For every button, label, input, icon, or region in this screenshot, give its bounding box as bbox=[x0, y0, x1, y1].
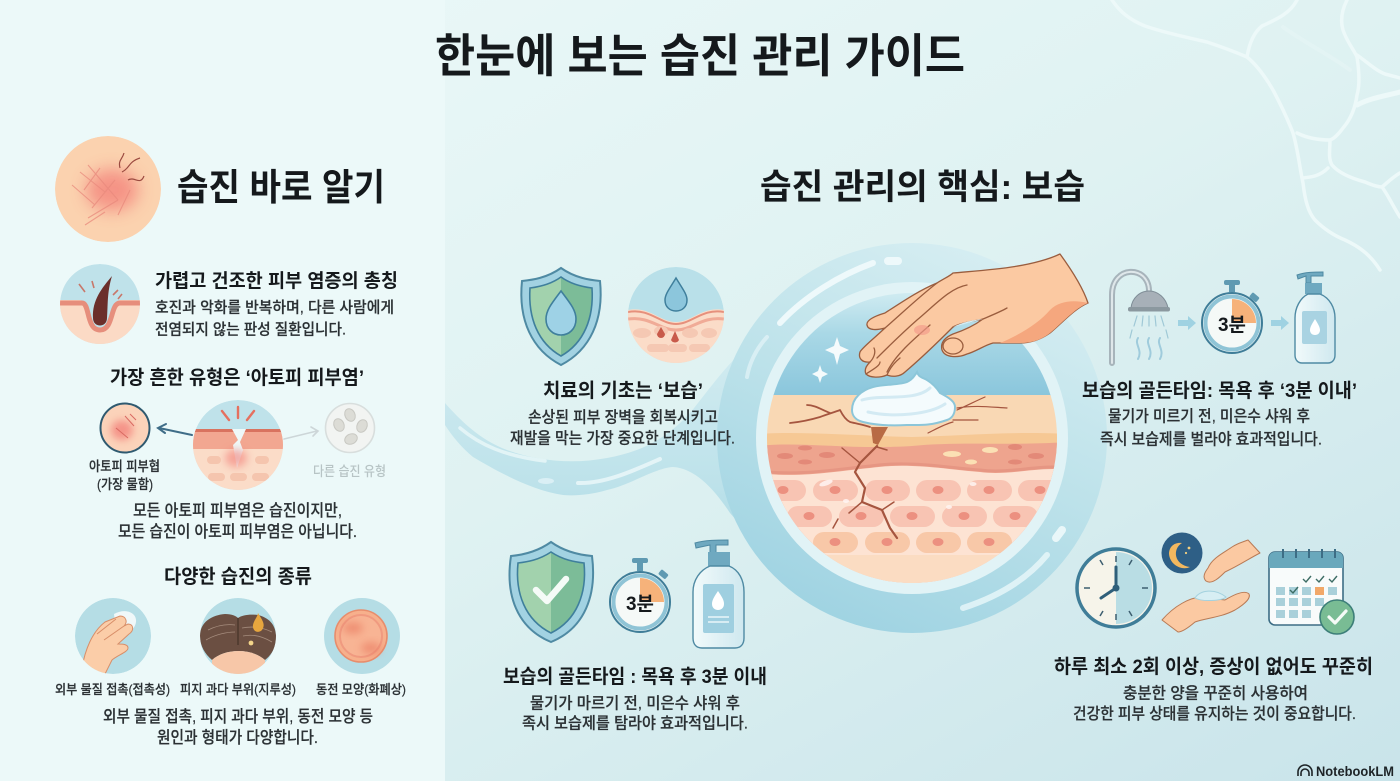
text: 즉시 보습제: 즉시 보습제를 벌라야 효과적입니다. bbox=[1100, 430, 1322, 448]
timer label: 3분 bbox=[626, 594, 654, 615]
text: 충분한 양: 충분한 양을 꾸준히 사용하여 bbox=[1123, 684, 1308, 702]
text: 족시 보습제: 족시 보습제를 탐라야 효과적입니다. bbox=[522, 714, 748, 732]
text: 장벽 회복: 손상된 피부 장벽을 회복시키고 bbox=[528, 408, 718, 426]
icon: cracked skin barrier bbox=[193, 400, 283, 490]
icon: other eczema types bbox=[326, 404, 374, 452]
icon: shield with check bbox=[510, 542, 593, 642]
text: 물기가 마르기 전: 물기가 마르기 전, 미은수 샤워 후 bbox=[530, 694, 740, 712]
icon: drop absorbing into skin bbox=[628, 267, 724, 370]
heading: 습진 바로 알기: 습진 바로 알기 bbox=[177, 167, 385, 208]
text: 재발 방지: 재발을 막는 가장 중요한 단계입니다. bbox=[510, 430, 735, 448]
label: 화폐상: 동전 모양(화폐상) bbox=[316, 682, 406, 697]
heading: 보습의 골든타임: 보습의 골든타임 : 목욕 후 3분 이내 bbox=[503, 666, 767, 688]
icon: hand applying cream bbox=[859, 254, 1088, 377]
label: 접촉성: 외부 물질 접촉(접촉성) bbox=[55, 682, 170, 697]
icon: hands sharing cream bbox=[1162, 540, 1260, 632]
text: 물기가 마르기 전: 물기가 미르기 전, 미은수 샤워 후 bbox=[1108, 408, 1310, 426]
cell rows bbox=[760, 480, 1064, 527]
panel: 습진 바로 알기 bbox=[55, 136, 406, 747]
block: 하루 2회 bbox=[1054, 532, 1373, 723]
illustration: skin cross-section lens bbox=[756, 282, 1068, 600]
block: 치료의 기초 bbox=[510, 267, 735, 448]
logo: NotebookLM: NotebookLM bbox=[1316, 764, 1394, 779]
skin cracks bbox=[790, 397, 1007, 538]
icon: moisturizer cream bbox=[852, 372, 955, 425]
icon: seborrheic scalp bbox=[200, 598, 276, 680]
illustration: outer ring highlights bbox=[747, 261, 1062, 608]
block: 아토피 피부염 bbox=[89, 367, 386, 541]
text: 호진과 악화: 호진과 악화를 반복하며, 다른 사람에게 bbox=[155, 298, 394, 316]
icon: contact dermatitis hand bbox=[75, 598, 151, 674]
icon: clock bbox=[1077, 549, 1155, 627]
icon: rash skin circle bbox=[55, 136, 161, 242]
icon: atopic rash circle bbox=[100, 404, 150, 452]
panel: 습진 관리의 핵심 bbox=[445, 168, 1373, 732]
arrow: timer to bottle bbox=[1271, 316, 1289, 330]
label: 가장 흔함: (가장 물함) bbox=[97, 477, 153, 492]
block: 골든타임 (좌측) bbox=[503, 540, 767, 732]
block: 피부 염증 정의 bbox=[60, 264, 398, 345]
text: 모든 아토피: 모든 아토피 피부염은 습진이지만, bbox=[133, 501, 342, 520]
icon: moon bbox=[1162, 532, 1202, 574]
icon: lotion bottle bbox=[1295, 272, 1335, 363]
arrow: to other types bbox=[284, 427, 318, 439]
icon: sparkles bbox=[812, 337, 849, 383]
text: 모든 습진: 모든 습진이 아토피 피부염은 아닙니다. bbox=[118, 522, 357, 541]
text: 만성 질환: 전염되지 않는 판성 질환입니다. bbox=[155, 320, 346, 338]
illustration: water swoosh bbox=[445, 337, 790, 585]
heading: 하루 최소 2회: 하루 최소 2회 이상, 증상이 없어도 꾸준히 bbox=[1054, 656, 1373, 678]
label: 지루성: 피지 과다 부위(지루성) bbox=[180, 682, 296, 697]
heading: 다양한 습진의 종류: 다양한 습진의 종류 bbox=[164, 566, 312, 588]
heading: 보습의 골든타임: 보습의 골든타임: 목욕 후 ‘3분 이내’ bbox=[1082, 380, 1357, 402]
icon: calendar with check bbox=[1269, 549, 1354, 634]
panel: left background bbox=[0, 0, 445, 781]
illustration: outer water ring bbox=[717, 243, 1107, 633]
heading: 가렵고 건조한 피부 염증의 총칭: 가렵고 건조한 피부 염증의 총칭 bbox=[155, 270, 398, 292]
block: 습진의 종류 bbox=[55, 566, 406, 747]
icon: stopwatch 3분 bbox=[610, 558, 670, 632]
block: 골든타임 (우측) bbox=[1082, 272, 1357, 448]
text: 외부 물질: 외부 물질 접촉, 피지 과다 부위, 동전 모양 등 bbox=[103, 707, 373, 726]
heading: 가장 흔한 유형: 가장 흔한 유형은 ‘아토피 피부염’ bbox=[110, 367, 364, 389]
icon: hair follicle cross-section bbox=[60, 264, 140, 345]
icon: shield with water drop bbox=[521, 268, 601, 365]
label: 아토피 피부염: 아토피 피부협 bbox=[89, 459, 160, 474]
arrow: to atopic bbox=[158, 424, 192, 435]
icon: stopwatch 3분 bbox=[1202, 280, 1262, 353]
icon: lotion bottle bbox=[693, 540, 744, 648]
background swirl: top right water pattern bbox=[1112, 0, 1400, 270]
icon: nummular eczema coin bbox=[324, 598, 400, 674]
icon: shower bbox=[1112, 272, 1170, 363]
label: 다른 습진 유형: 다른 습진 유형 bbox=[313, 464, 386, 479]
heading: 습진 관리의 핵심: 보습: 습진 관리의 핵심: 보습 bbox=[760, 168, 1085, 207]
timer label: 3분 bbox=[1218, 315, 1246, 336]
text: 건강한 피부: 건강한 피부 상태를 유지하는 것이 중요합니다. bbox=[1073, 705, 1356, 723]
title: 한눈에 보는 습진 관리 가이드 bbox=[435, 30, 965, 82]
arrow: shower to timer bbox=[1178, 316, 1196, 330]
heading: 치료의 기초: 치료의 기초는 ‘보습’ bbox=[543, 380, 703, 402]
text: 원인과 형태: 원인과 형태가 다양합니다. bbox=[157, 728, 318, 747]
